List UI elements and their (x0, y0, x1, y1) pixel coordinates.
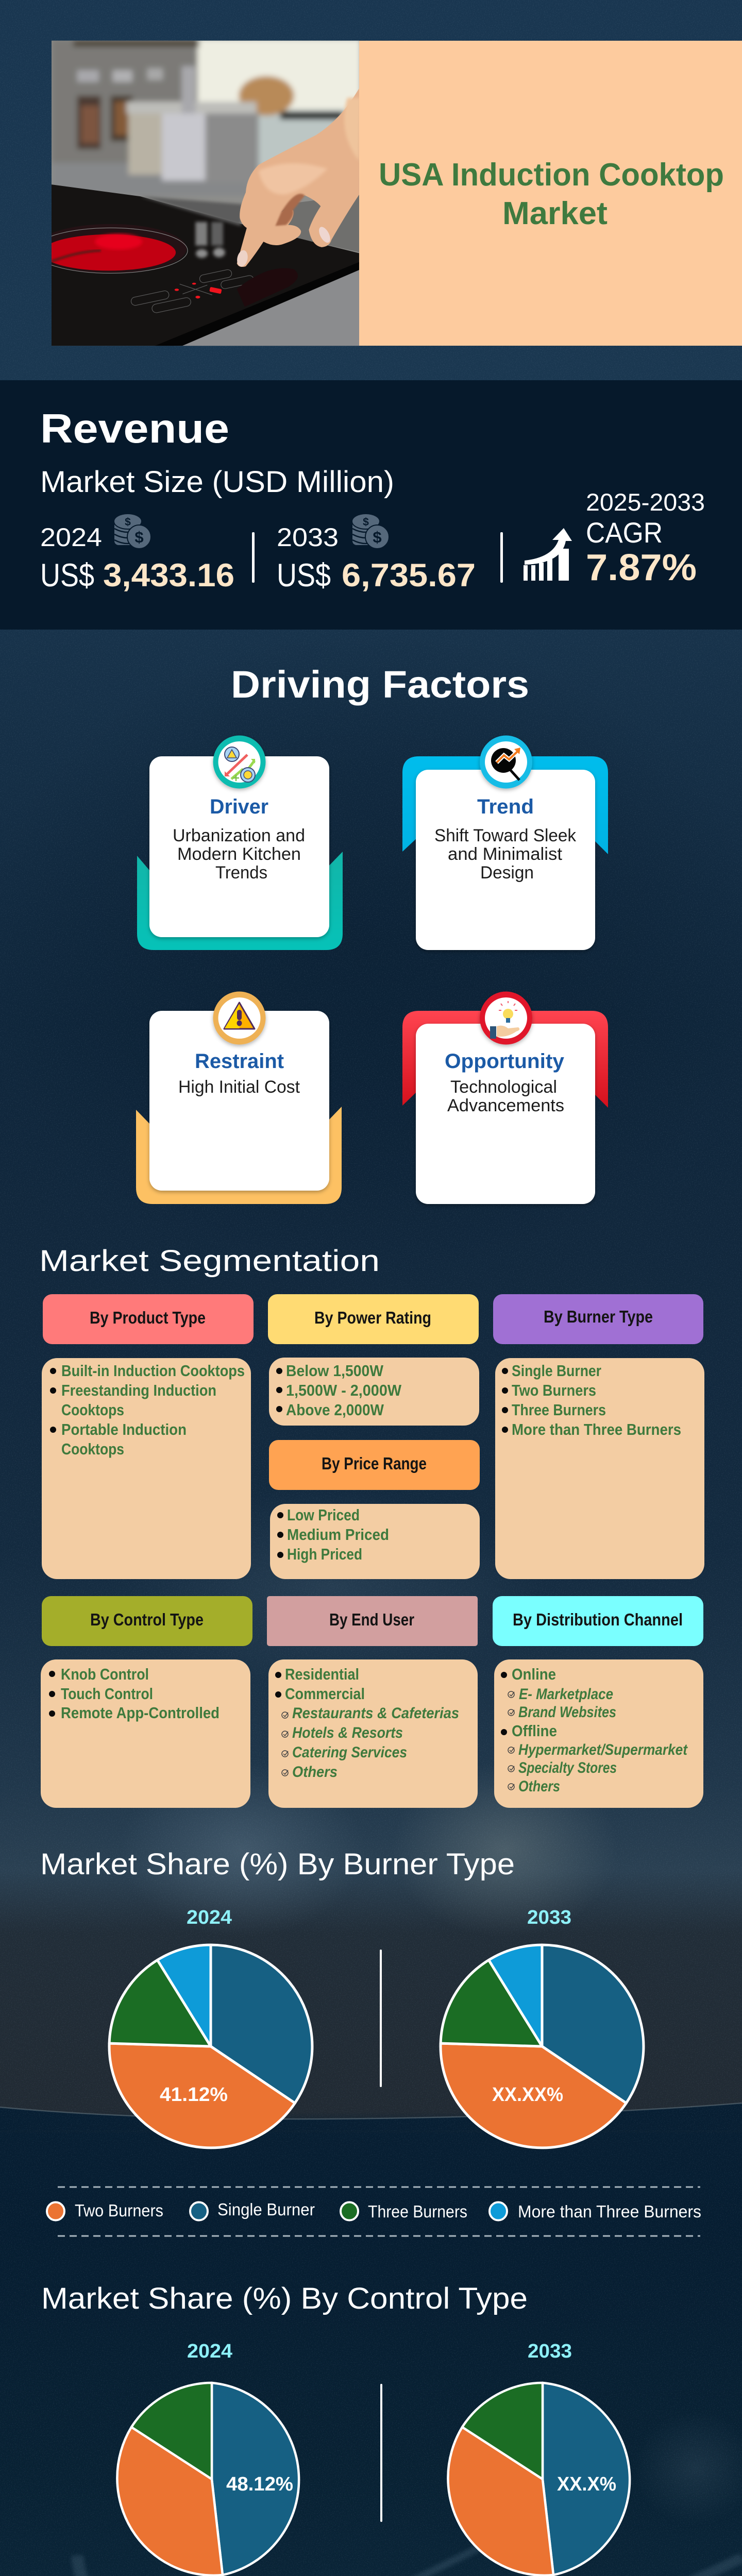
heading: market segmentation: Market Segmentation (39, 1244, 380, 1278)
distribution channel list: Specialty Stores (518, 1759, 617, 1776)
panel: by power rating (268, 1294, 479, 1426)
market size label: Market Size (USD Million) (40, 465, 394, 499)
chart: burner type 2033: 2033 (527, 1907, 571, 1928)
chart: burner type 2033 (441, 1907, 644, 2148)
panel: by power rating: By Power Rating (314, 1308, 431, 1327)
stat: 2024 revenue (40, 523, 234, 594)
panel: by end user (267, 1596, 478, 1808)
heading: driving factors: Driving Factors (231, 663, 529, 706)
driver description: Trends (215, 863, 267, 883)
legend: burner type: Two Burners (75, 2201, 163, 2220)
legend: burner type: More than Three Burners (518, 2202, 701, 2221)
panel: by end user: By End User (329, 1610, 414, 1629)
stat: CAGR: CAGR (586, 516, 663, 549)
price range list: High Priced (287, 1545, 362, 1563)
icon: driver (213, 736, 266, 788)
panel: driver (137, 736, 343, 950)
panel: restraint: Restraint (195, 1050, 284, 1073)
burner type list: More than Three Burners (512, 1420, 681, 1438)
stat: CAGR (586, 488, 705, 588)
burner type list: Two Burners (512, 1381, 596, 1399)
chart: burner type 2033: XX.XX% (492, 2084, 563, 2106)
icon: coins 2024: $ (134, 528, 144, 546)
panel: opportunity: Opportunity (445, 1050, 565, 1073)
chart: control type 2024: 48.12% (226, 2473, 293, 2495)
opportunity description: Advancements (447, 1096, 564, 1115)
product type list: Cooktops (61, 1401, 124, 1419)
title panel: Market (502, 196, 608, 231)
opportunity description: Technological (450, 1077, 557, 1097)
driver description: Modern Kitchen (177, 844, 301, 864)
icon: coins 2033: $ (373, 528, 382, 546)
burner type list: Three Burners (512, 1401, 606, 1419)
icon: coins 2024 (114, 514, 151, 549)
stat: 2033 revenue (277, 523, 476, 594)
trend description: Shift Toward Sleek (434, 826, 577, 845)
panel: by product type (42, 1294, 254, 1579)
panel: by distribution channel (493, 1596, 703, 1808)
burner type list: Single Burner (512, 1362, 601, 1380)
distribution channel list: Hypermarket/Supermarket (518, 1741, 688, 1758)
trend description: and Minimalist (448, 844, 563, 864)
end user list: Catering Services (292, 1744, 407, 1761)
stat: 2024 revenue: 3,433.16 (103, 557, 234, 594)
stat: CAGR: 2025-2033 (586, 488, 705, 516)
panel: by price range (269, 1440, 480, 1579)
legend: burner type (47, 2187, 701, 2236)
trend description: Design (480, 863, 534, 883)
opportunity description (447, 1077, 564, 1115)
distribution channel list: E- Marketplace (519, 1686, 613, 1703)
panel: by control type (41, 1596, 252, 1808)
control type list: Touch Control (61, 1685, 153, 1703)
legend: burner type: Single Burner (217, 2200, 315, 2219)
title panel: USA Induction Cooktop (379, 157, 724, 193)
control type list: Remote App-Controlled (61, 1704, 220, 1722)
price range list: Low Priced (287, 1506, 360, 1524)
panel: restraint (136, 991, 342, 1204)
chart: burner type 2024: 2024 (187, 1907, 232, 1928)
panel: by control type: By Control Type (90, 1610, 204, 1629)
chart: control type 2024: 2024 (187, 2341, 232, 2362)
icon: coins 2033 (352, 514, 389, 549)
driver description (173, 826, 305, 883)
end user list: Restaurants & Cafeterias (292, 1705, 459, 1722)
icon: trend (480, 736, 532, 788)
panel: driver: Driver (210, 795, 268, 818)
product type list: Built-in Induction Cooktops (61, 1362, 245, 1380)
heading: market share by burner type: Market Share (%) By Burner Type (40, 1848, 515, 1881)
panel: revenue (0, 380, 742, 630)
power rating list (276, 1362, 402, 1419)
distribution channel list: Others (518, 1778, 560, 1795)
distribution channel list: Online (512, 1665, 556, 1683)
power rating list: Above 2,000W (286, 1401, 384, 1419)
distribution channel list: Offline (512, 1722, 557, 1740)
photo: hand touching induction cooktop (34, 39, 361, 348)
end user list: Hotels & Resorts (292, 1724, 403, 1741)
panel: by burner type: By Burner Type (544, 1307, 653, 1326)
icon: opportunity (480, 991, 532, 1045)
control type list (49, 1665, 220, 1722)
panel: trend: Trend (477, 795, 534, 818)
end user list: Others (292, 1764, 338, 1781)
power rating list: 1,500W - 2,000W (286, 1381, 402, 1399)
distribution channel list: Brand Websites (518, 1704, 616, 1721)
chart: burner type 2024 (109, 1907, 312, 2148)
panel: opportunity (402, 991, 608, 1204)
panel: by distribution channel: By Distribution Channel (513, 1610, 683, 1629)
distribution channel list (501, 1665, 688, 1795)
chart: control type 2024 (117, 2341, 299, 2575)
stat: 2024 revenue: 2024 (40, 523, 102, 552)
price range list: Medium Priced (287, 1526, 389, 1544)
icon: growth chart (524, 528, 572, 581)
stat: 2033 revenue: 6,735.67 (342, 557, 476, 594)
price range list (277, 1506, 389, 1563)
chart: burner type 2024: 41.12% (160, 2084, 228, 2106)
icon: restraint (213, 991, 266, 1045)
power rating list: Below 1,500W (286, 1362, 384, 1380)
product type list (50, 1362, 245, 1458)
panel: trend (402, 736, 608, 950)
panel: by burner type (493, 1294, 704, 1579)
heading: revenue: Revenue (40, 405, 229, 451)
stat: 2033 revenue: 2033 (277, 523, 339, 552)
chart: control type 2033: 2033 (528, 2341, 572, 2362)
chart: control type 2033: XX.X% (557, 2473, 616, 2495)
product type list: Cooktops (61, 1440, 124, 1458)
control type list: Knob Control (61, 1665, 149, 1683)
product type list: Freestanding Induction (61, 1381, 216, 1399)
title panel (359, 41, 742, 346)
icon: coins 2033: $ (363, 516, 369, 528)
legend: burner type: Three Burners (368, 2202, 467, 2221)
stat: 2033 revenue: US$ (277, 557, 331, 594)
end user list (275, 1665, 459, 1781)
product type list: Portable Induction (61, 1420, 187, 1438)
burner type list (502, 1362, 681, 1438)
heading: market share by control type: Market Share (%) By Control Type (41, 2282, 528, 2315)
trend description (434, 826, 577, 883)
icon: coins 2024: $ (125, 516, 131, 528)
end user list: Commercial (285, 1685, 365, 1703)
stat: CAGR: 7.87% (586, 547, 697, 588)
driver description: Urbanization and (173, 826, 305, 845)
restraint description: High Initial Cost (178, 1077, 300, 1097)
stat: 2024 revenue: US$ (40, 557, 94, 594)
chart: control type 2033 (448, 2341, 630, 2575)
panel: by price range: By Price Range (322, 1454, 427, 1473)
panel: by product type: By Product Type (90, 1308, 206, 1327)
end user list: Residential (285, 1665, 359, 1683)
